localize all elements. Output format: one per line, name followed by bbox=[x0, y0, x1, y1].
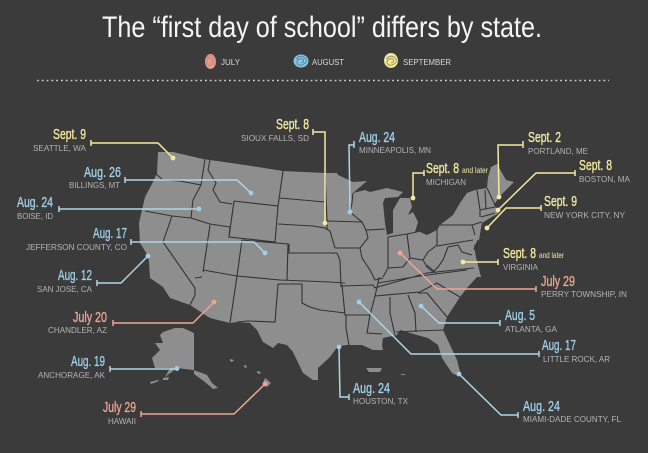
callout: Little Rock: Aug. 17 bbox=[542, 337, 576, 354]
callout: Perry Township: July 29 bbox=[541, 273, 575, 290]
callout: Michigan: and later bbox=[462, 165, 488, 175]
Hawaii and islands bbox=[150, 359, 271, 387]
callout: New York City bbox=[485, 193, 626, 230]
legend item: August: AUGUST bbox=[312, 58, 344, 67]
callout: Perry Township: PERRY TOWNSHIP, IN bbox=[541, 290, 627, 299]
callout: Minneapolis: Aug. 24 bbox=[359, 129, 395, 146]
callout: Hawaii bbox=[103, 382, 267, 426]
callout: Portland: PORTLAND, ME bbox=[528, 147, 588, 156]
title: The “first day of school” differs by state. bbox=[102, 11, 542, 44]
callout: Houston: HOUSTON, TX bbox=[353, 397, 409, 406]
callout: Portland bbox=[497, 129, 588, 199]
callout: Michigan: MICHIGAN bbox=[426, 178, 466, 187]
callout: Sioux Falls: SIOUX FALLS, SD bbox=[241, 134, 309, 143]
Alaska bbox=[152, 328, 218, 389]
legend item: July: JULY bbox=[221, 58, 241, 67]
callout: Seattle: SEATTLE, WA bbox=[33, 144, 87, 153]
callout: Boise: Aug. 24 bbox=[17, 194, 53, 211]
callout: Michigan: Sept. 8 bbox=[426, 160, 459, 177]
callout: Seattle: Sept. 9 bbox=[53, 126, 86, 143]
callout: Chandler: July 20 bbox=[73, 309, 107, 326]
callout: Jefferson County: Aug. 17 bbox=[93, 225, 127, 242]
contiguous states bbox=[139, 152, 514, 380]
callout: Boston bbox=[496, 157, 631, 212]
callout: Chandler: CHANDLER, AZ bbox=[48, 326, 107, 335]
callout: Virginia: VIRGINIA bbox=[503, 263, 539, 272]
callout: Boston: BOSTON, MA bbox=[579, 175, 631, 184]
callout: Billings: BILLINGS, MT bbox=[69, 181, 120, 190]
callout: San Jose: Aug. 12 bbox=[58, 267, 92, 284]
callout: Houston bbox=[337, 345, 409, 406]
callout: Miami-Dade County: MIAMI-DADE COUNTY, FL bbox=[523, 415, 622, 424]
callout: Atlanta: Aug. 5 bbox=[505, 307, 535, 324]
callout: Hawaii: HAWAII bbox=[108, 417, 136, 426]
callout: Virginia bbox=[461, 245, 564, 272]
callout: Houston: Aug. 24 bbox=[353, 380, 390, 397]
callout: Boise: BOISE, ID bbox=[17, 212, 53, 221]
callout: Miami-Dade County: Aug. 24 bbox=[523, 398, 560, 415]
callout: Portland: Sept. 2 bbox=[528, 129, 561, 146]
legend item: September: SEPTEMBER bbox=[403, 58, 451, 67]
callout: Anchorage: Aug. 19 bbox=[71, 353, 105, 370]
callout: Sioux Falls bbox=[241, 116, 327, 225]
callout: Chandler bbox=[48, 300, 216, 335]
callout: Anchorage bbox=[38, 353, 179, 380]
callout: Minneapolis bbox=[348, 129, 431, 214]
callout: Perry Township bbox=[398, 251, 627, 299]
callout: New York City: Sept. 9 bbox=[544, 193, 577, 210]
callout: Atlanta: ATLANTA, GA bbox=[505, 325, 558, 334]
callout: Virginia: Sept. 8 bbox=[503, 245, 536, 262]
callout: Billings: Aug. 26 bbox=[84, 164, 121, 181]
callout: Miami-Dade County bbox=[457, 372, 622, 424]
map of the United States bbox=[139, 152, 514, 389]
callout: Little Rock bbox=[357, 300, 610, 364]
callout: Seattle bbox=[33, 126, 175, 160]
callout: Jefferson County bbox=[26, 225, 267, 255]
callout: New York City: NEW YORK CITY, NY bbox=[544, 211, 626, 220]
legend item: September bbox=[384, 53, 451, 68]
legend item: August bbox=[294, 54, 344, 68]
callout: Boise bbox=[17, 194, 201, 221]
Puerto Rico bbox=[366, 368, 405, 375]
callout: Anchorage: ANCHORAGE, AK bbox=[38, 371, 106, 380]
callout: Michigan bbox=[411, 160, 488, 200]
callout: Minneapolis: MINNEAPOLIS, MN bbox=[359, 146, 431, 155]
callout: Atlanta bbox=[419, 304, 558, 334]
callout: Little Rock: LITTLE ROCK, AR bbox=[543, 355, 610, 364]
callout: Virginia: and later bbox=[539, 250, 564, 260]
callout: San Jose: SAN JOSE, CA bbox=[37, 285, 93, 294]
callout: Boston: Sept. 8 bbox=[579, 157, 612, 174]
callout: Jefferson County: JEFFERSON COUNTY, CO bbox=[26, 243, 127, 252]
callout: San Jose bbox=[37, 254, 150, 294]
callout: Billings bbox=[69, 164, 253, 195]
callout: Sioux Falls: Sept. 8 bbox=[276, 116, 309, 133]
state borders bbox=[145, 159, 495, 345]
legend bbox=[205, 53, 451, 69]
callout: Hawaii: July 29 bbox=[103, 399, 136, 416]
legend item: July bbox=[205, 54, 241, 69]
